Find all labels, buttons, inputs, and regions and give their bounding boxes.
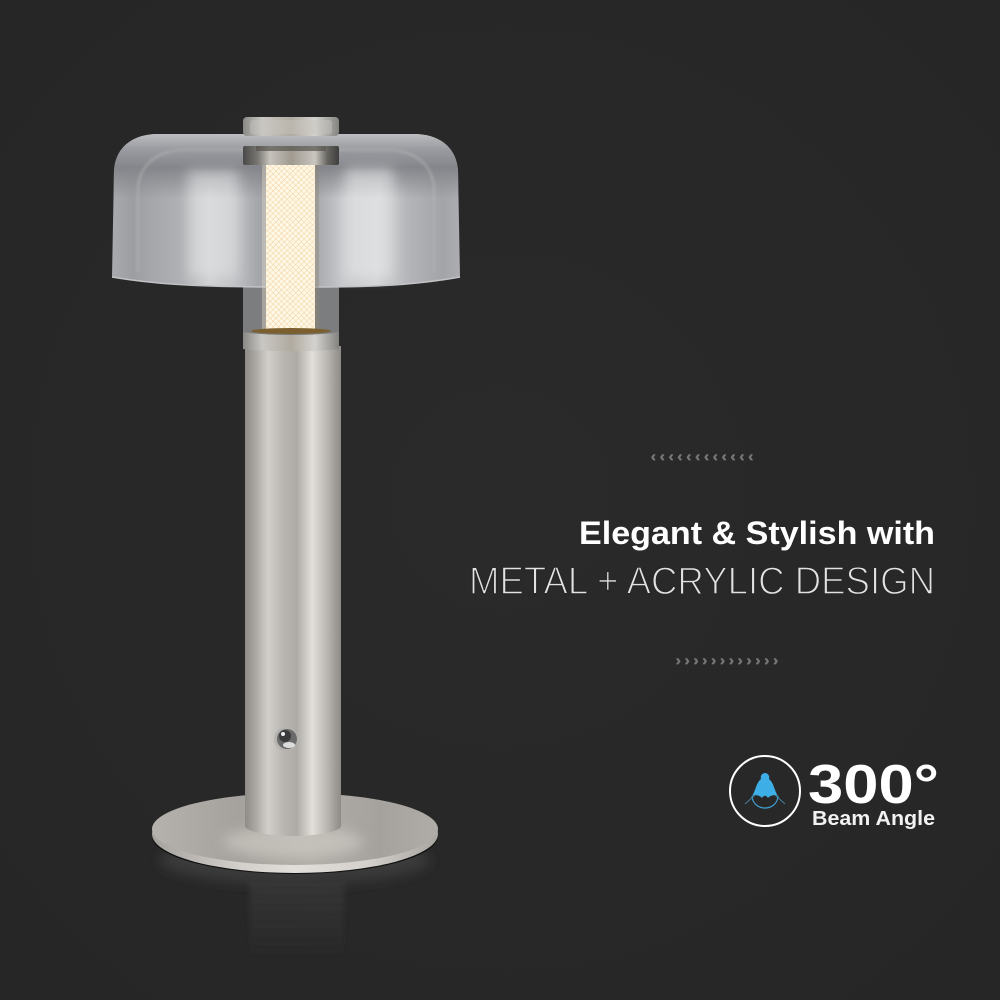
glass tube <box>243 160 339 335</box>
beam angle badge <box>730 753 939 830</box>
base reflection <box>160 836 430 958</box>
touch button <box>274 727 298 751</box>
metal stem <box>245 346 341 836</box>
metal collar <box>243 328 339 351</box>
value: 300 degrees: 300° <box>808 753 939 815</box>
glowing mesh light <box>262 165 319 333</box>
icon: beam angle <box>730 756 800 826</box>
label: beam angle: Beam Angle <box>812 808 935 830</box>
heading: elegant and stylish: Elegant & Stylish with <box>579 515 935 551</box>
decorative left chevrons: ‹‹‹‹‹‹‹‹‹‹‹‹ <box>651 448 753 464</box>
decorative right chevrons: ›››››››››››› <box>676 652 778 668</box>
acrylic shade <box>112 134 460 287</box>
subheading: metal and acrylic design: METAL + ACRYLIC DESIGN <box>469 560 935 603</box>
dark metal ring <box>243 146 339 165</box>
top cap <box>243 117 339 136</box>
table lamp <box>112 117 460 958</box>
round base plate <box>152 793 438 874</box>
